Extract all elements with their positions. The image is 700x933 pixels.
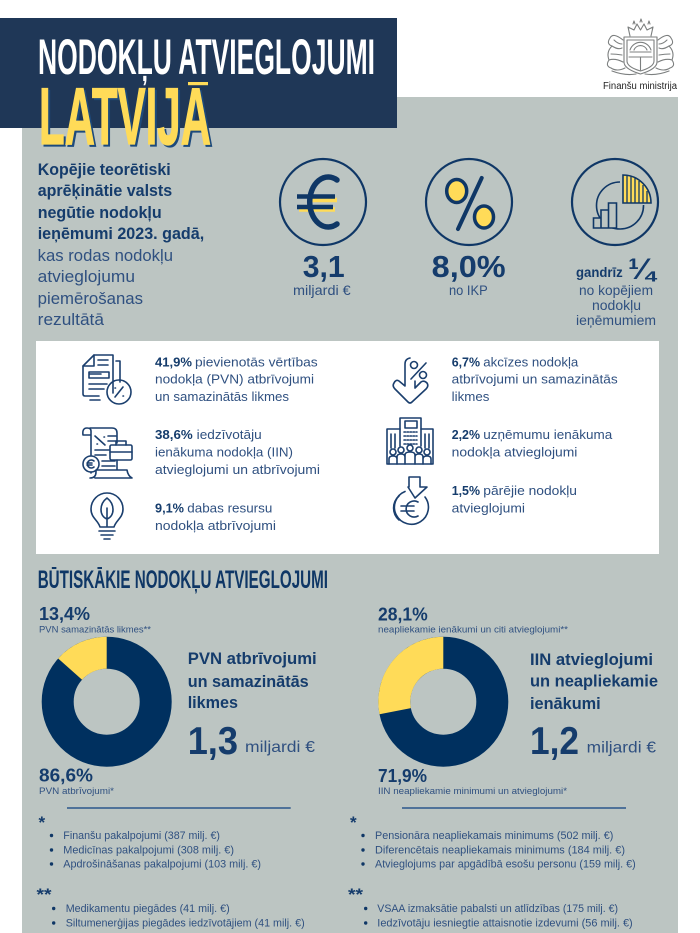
title banner: LATVIJĀ <box>41 74 213 164</box>
list: IIN allowances <box>361 830 636 871</box>
donut chart: PVN <box>58 653 156 751</box>
title banner: LATVIJĀ <box>39 72 211 162</box>
list: IIN other items: Iedzīvotāju iesniegtie attaisnotie izdevumi (56 milj. €) <box>377 918 633 930</box>
panel: IIN donut <box>378 605 658 797</box>
label: 28,1%: neapliekamie ienākumi un citi atvieglojumi** <box>378 625 568 636</box>
stat: almost a quarter of tax revenue: gandrīz <box>576 265 623 280</box>
text: PVN share: nodokļa (PVN) atbrīvojumi <box>155 372 314 387</box>
text: excise share: akcīzes nodokļa <box>483 355 579 370</box>
footnotes: IIN: * <box>350 813 357 832</box>
list: IIN other items: VSAA izmaksātie pabalsti un atlīdzības (175 milj. €) <box>377 903 618 915</box>
stat: 3,1 billion euro <box>280 159 366 298</box>
total: 1,3 billion: 1,3 <box>188 720 238 763</box>
panel: PVN donut <box>39 604 317 797</box>
panel: breakdown by tax <box>36 341 659 554</box>
list: PVN exemptions: Medicīnas pakalpojumi (308 milj. €) <box>63 845 234 857</box>
stat: almost a quarter of tax revenue: ¼ <box>628 253 658 286</box>
footnotes: PVN: ** <box>36 885 52 904</box>
icon: euro <box>280 159 366 245</box>
footnotes: PVN: * <box>38 813 46 832</box>
text: corporate income tax share: 2,2% <box>452 427 480 442</box>
label: 71,9%: IIN neapliekamie minimumi un atvieglojumi* <box>378 786 567 797</box>
intro text block: aprēķinātie valsts <box>38 182 172 200</box>
list: IIN other items <box>364 903 633 930</box>
list: PVN exemptions: Apdrošināšanas pakalpojumi (103 milj. €) <box>63 859 261 871</box>
text: IIN share: atvieglojumi un atbrīvojumi <box>155 462 320 477</box>
text: other taxes share: 1,5% <box>452 483 480 498</box>
total: 1,2 billion: miljardi € <box>587 740 656 757</box>
total: 1,2 billion <box>530 720 656 763</box>
label: 13,4%: PVN samazinātās likmes** <box>39 625 151 636</box>
section heading: BŪTISKĀKIE NODOKĻU ATVIEGLOJUMI <box>38 566 328 594</box>
intro text block: negūtie nodokļu <box>38 204 162 222</box>
donut chart: IIN <box>394 653 492 751</box>
icon: income document with briefcase <box>83 428 132 478</box>
text: corporate income tax share: nodokļa atvieglojumi <box>452 445 578 460</box>
label: 13,4% <box>39 604 151 636</box>
label: 86,6%: PVN atbrīvojumi* <box>39 786 114 797</box>
text: other taxes share: pārējie nodokļu <box>483 483 577 498</box>
donut heading: IIN: ienākumi <box>530 694 601 713</box>
text: excise share: likmes <box>452 389 490 404</box>
donut heading: PVN: likmes <box>188 693 238 712</box>
footnotes: PVN <box>36 813 305 930</box>
logo: coat of arms and ministry name <box>603 19 677 92</box>
list: PVN exemptions <box>50 830 261 871</box>
intro text block: ieņēmumi 2023. gadā, <box>38 225 204 243</box>
icon: light bulb with leaf <box>91 493 123 539</box>
list: PVN reduced rates: Siltumenerģijas piegādes iedzīvotājiem (41 milj. €) <box>66 917 305 930</box>
intro text block: piemērošanas <box>38 290 143 308</box>
list: IIN allowances: Diferencētais neapliekamais minimums (184 milj. €) <box>375 845 625 857</box>
text: excise share: atbrīvojumi un samazinātās <box>452 372 618 387</box>
icon: arrow down with percent <box>393 358 428 403</box>
list: PVN exemptions: Finanšu pakalpojumi (387 milj. €) <box>63 830 220 842</box>
text: corporate income tax share: uzņēmumu ienākuma <box>483 427 613 442</box>
label: 86,6% <box>39 766 114 797</box>
donut heading: PVN <box>188 649 317 712</box>
intro text block <box>38 161 204 329</box>
text: excise share <box>452 355 618 404</box>
label: 28,1% <box>378 605 568 636</box>
icon: percent <box>426 159 512 245</box>
intro text block: Kopējie teorētiski <box>38 161 171 179</box>
stat: almost a quarter of tax revenue: no kopējiem <box>579 283 653 298</box>
icon: coin with arrow <box>394 477 428 524</box>
donut heading: IIN <box>530 650 658 713</box>
text: PVN share: 41,9% <box>155 355 192 370</box>
list: IIN allowances: Atvieglojums par apgādībā esošu personu (159 milj. €) <box>375 859 636 871</box>
stat: almost a quarter of tax revenue <box>572 159 658 328</box>
text: corporate income tax share <box>452 427 613 460</box>
intro text block: rezultātā <box>38 311 105 329</box>
list: PVN reduced rates: Medikamentu piegādes (41 milj. €) <box>66 903 230 915</box>
stat: almost a quarter of tax revenue: ieņēmumiem <box>576 313 656 328</box>
label: 71,9% <box>378 766 567 797</box>
intro text block: atvieglojumu <box>38 268 135 286</box>
text: natural resources share <box>155 501 276 533</box>
footnotes: IIN: ** <box>348 885 363 904</box>
label: 71,9%: 71,9% <box>378 766 427 786</box>
text: PVN share: pievienotās vērtības <box>195 355 318 370</box>
stat: 3,1 billion euro: 3,1 <box>303 249 345 284</box>
text: other taxes share <box>452 483 577 516</box>
total: 1,3 billion <box>188 720 315 763</box>
text: IIN share: 38,6% <box>155 427 193 442</box>
text: excise share: 6,7% <box>452 355 480 370</box>
text: PVN share <box>155 355 318 404</box>
donut heading: PVN: PVN atbrīvojumi <box>188 649 317 668</box>
intro text block: kas rodas nodokļu <box>38 247 173 265</box>
text: PVN share: un samazinātās likmes <box>155 389 290 404</box>
footnotes: IIN <box>348 813 636 930</box>
logo: coat of arms and ministry name: Finanšu ministrija <box>603 81 677 92</box>
list: IIN allowances: Pensionāra neapliekamais minimums (502 milj. €) <box>375 830 613 842</box>
text: natural resources share: dabas resursu <box>187 501 272 516</box>
stat: almost a quarter of tax revenue: nodokļu <box>592 298 641 313</box>
title banner <box>0 18 397 148</box>
label: 86,6%: 86,6% <box>39 766 93 786</box>
text: IIN share: ienākuma nodokļa (IIN) <box>155 445 293 460</box>
list: PVN reduced rates <box>52 903 305 930</box>
icon: pie and bars <box>572 159 658 245</box>
label: 28,1%: 28,1% <box>378 605 428 625</box>
total: 1,2 billion: 1,2 <box>530 720 579 763</box>
text: natural resources share: 9,1% <box>155 501 184 516</box>
label: 13,4%: 13,4% <box>39 604 90 624</box>
stat: 8,0% of GDP <box>426 159 512 298</box>
donut heading: IIN: IIN atvieglojumi <box>530 650 653 669</box>
text: other taxes share: atvieglojumi <box>452 501 525 516</box>
stat: 8,0% of GDP: 8,0% <box>432 249 506 284</box>
stat: 3,1 billion euro: miljardi € <box>293 283 351 298</box>
text: IIN share: iedzīvotāju <box>197 427 262 442</box>
text: natural resources share: nodokļa atbrīvojumi <box>155 518 276 533</box>
stat: 8,0% of GDP: no IKP <box>449 283 488 298</box>
total: 1,3 billion: miljardi € <box>245 739 315 756</box>
title banner: NODOKĻU ATVIEGLOJUMI <box>38 29 375 85</box>
donut heading: IIN: un neapliekamie <box>530 672 658 691</box>
text: IIN share <box>155 427 320 477</box>
donut heading: PVN: un samazinātās <box>188 672 309 691</box>
icon: office building with people <box>387 418 433 464</box>
icon: document with percent <box>83 355 131 404</box>
